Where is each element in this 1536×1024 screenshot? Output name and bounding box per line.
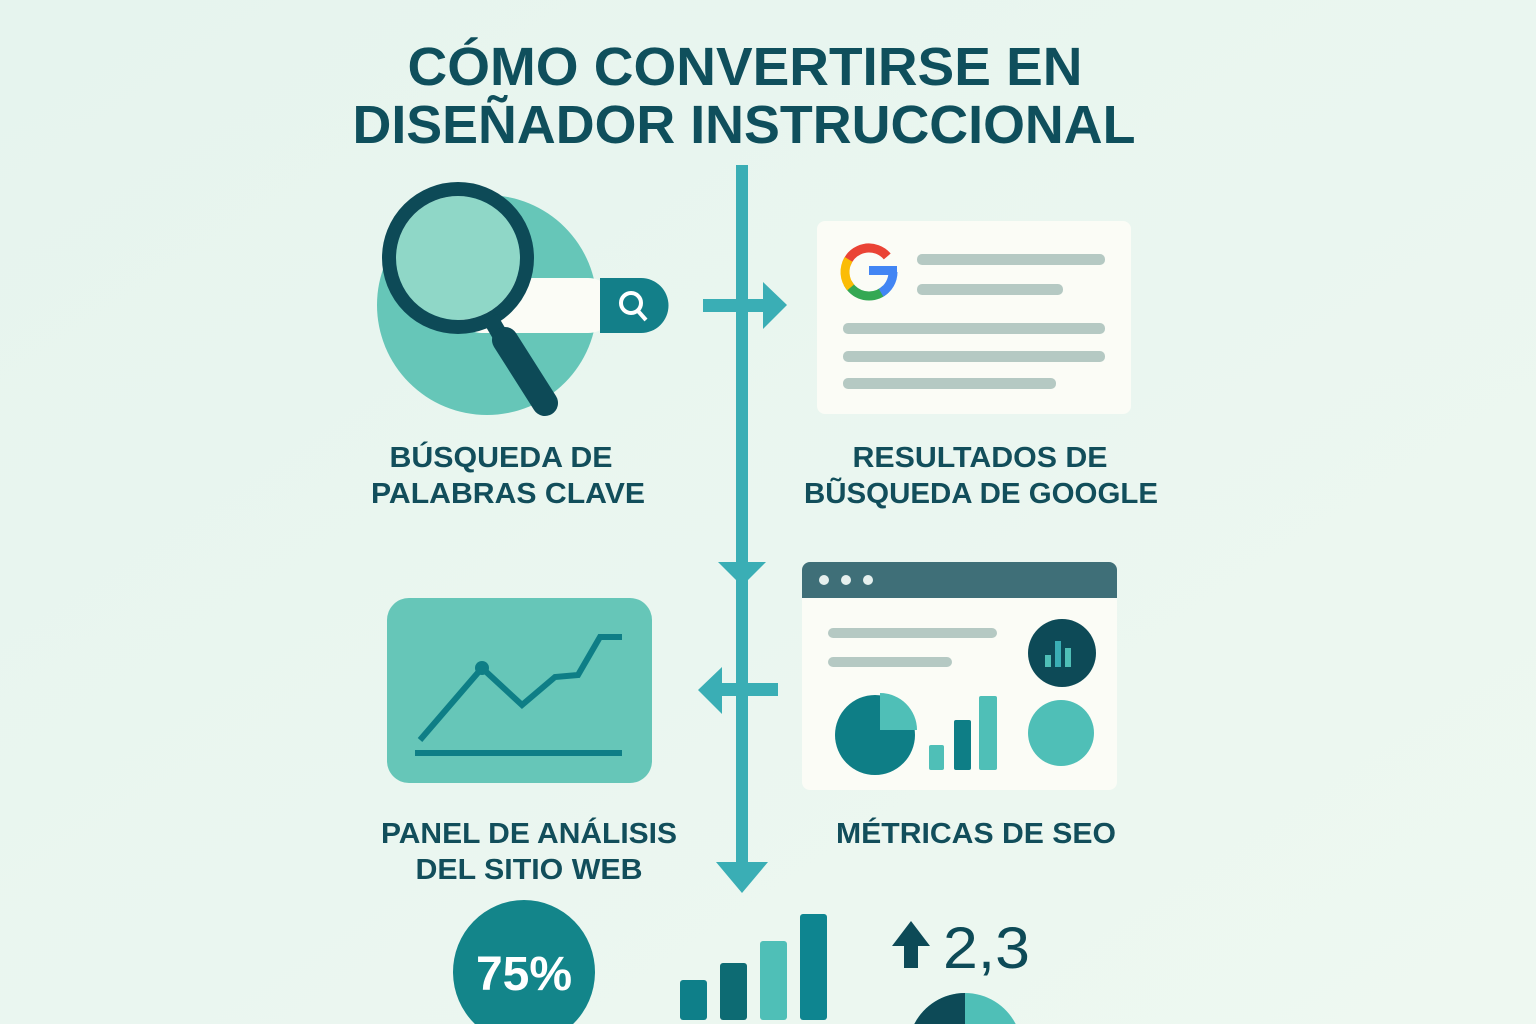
stat: 75%: 75% bbox=[476, 948, 572, 1001]
label: búsqueda: PALABRAS CLAVE bbox=[371, 478, 645, 510]
label: búsqueda: BÚSQUEDA DE bbox=[390, 440, 612, 474]
label: panel de análisis: DEL SITIO WEB bbox=[416, 854, 642, 886]
label: panel de análisis bbox=[381, 816, 677, 886]
label: búsqueda bbox=[371, 440, 645, 510]
pie chart bbox=[914, 993, 1016, 1024]
label: métricas: MÉTRICAS DE SEO bbox=[836, 816, 1116, 850]
bar chart bbox=[680, 914, 827, 1020]
title bbox=[352, 37, 1136, 155]
browser: seo metrics bbox=[802, 562, 1117, 790]
label: panel de análisis: PANEL DE ANÁLISIS bbox=[381, 816, 677, 850]
stat: 75% bbox=[453, 900, 595, 1024]
arrow: left bbox=[698, 667, 778, 714]
title: DISEÑADOR INSTRUCCIONAL bbox=[352, 95, 1136, 155]
title: CÓMO CONVERTIRSE EN bbox=[408, 37, 1082, 97]
stat: up 2,3 bbox=[892, 916, 1030, 981]
label: resultados: RESULTADOS DE bbox=[852, 442, 1108, 474]
label: resultados bbox=[804, 442, 1158, 510]
stat: up 2,3: 2,3 bbox=[943, 916, 1030, 981]
arrow: right bbox=[703, 282, 787, 329]
icon: keyword search bbox=[377, 189, 668, 415]
card: google results bbox=[817, 221, 1131, 414]
label: resultados: BŨSQUEDA DE GOOGLE bbox=[804, 476, 1158, 510]
chart panel bbox=[387, 598, 652, 783]
timeline vertical line bbox=[716, 165, 768, 893]
